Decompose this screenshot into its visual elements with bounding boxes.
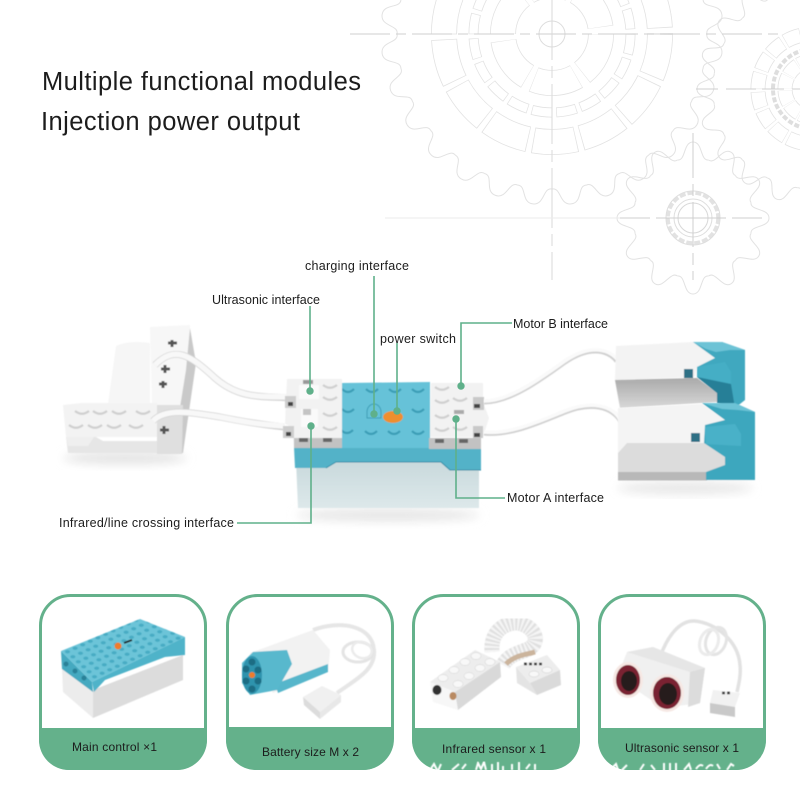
control body <box>296 460 479 508</box>
card: ultrasonic sensor <box>598 596 766 770</box>
callout: ultrasonic interface <box>309 306 311 391</box>
product: motor A <box>617 403 755 494</box>
product image: ultrasonic sensor <box>613 621 740 717</box>
label: main control: Main control ×1 <box>72 740 157 754</box>
left white block <box>285 379 342 447</box>
callout: motor B interface <box>461 323 512 386</box>
callout labels: Ultrasonic interface <box>212 293 320 307</box>
product: sensor assembly <box>63 325 196 464</box>
callout: motor A interface <box>456 419 505 498</box>
card: infrared sensor <box>412 596 580 770</box>
cables: left <box>153 354 289 427</box>
card: main control <box>39 596 207 770</box>
product image: battery motor <box>242 625 374 719</box>
callout labels: charging interface <box>305 259 409 273</box>
gear: right <box>697 0 800 205</box>
callout: charging interface <box>373 276 375 413</box>
callout lines and dots <box>237 276 512 523</box>
callout labels: power switch <box>380 332 456 346</box>
callout: infrared interface <box>237 426 311 523</box>
product: motor B <box>615 342 745 408</box>
product image: main control <box>61 619 185 718</box>
control teal top <box>340 382 430 448</box>
label: battery: Battery size M x 2 <box>262 745 359 759</box>
callout labels: Infrared/line crossing interface <box>59 516 234 530</box>
callout: power switch <box>396 343 398 411</box>
watermark residue <box>430 762 734 771</box>
gear: large <box>380 0 724 206</box>
product image: infrared sensor <box>430 623 561 710</box>
label: infrared sensor: Infrared sensor x 1 <box>442 742 546 756</box>
title <box>41 68 361 136</box>
gear: small <box>617 142 769 294</box>
callout labels: Motor B interface <box>513 317 608 331</box>
card: battery <box>226 596 393 770</box>
label: ultrasonic sensor: Ultrasonic sensor x 1 <box>625 741 739 755</box>
right white block <box>430 383 489 437</box>
product: main control <box>283 379 489 521</box>
callout labels: Motor A interface <box>507 491 604 505</box>
callout labels <box>59 259 608 530</box>
orange power switch <box>383 411 403 423</box>
background gear drawing <box>350 0 800 294</box>
title: Multiple functional modules <box>42 68 361 96</box>
control teal band <box>294 447 481 470</box>
title: Injection power output <box>41 108 300 136</box>
cables: right <box>484 350 622 433</box>
callout dots <box>306 382 465 430</box>
